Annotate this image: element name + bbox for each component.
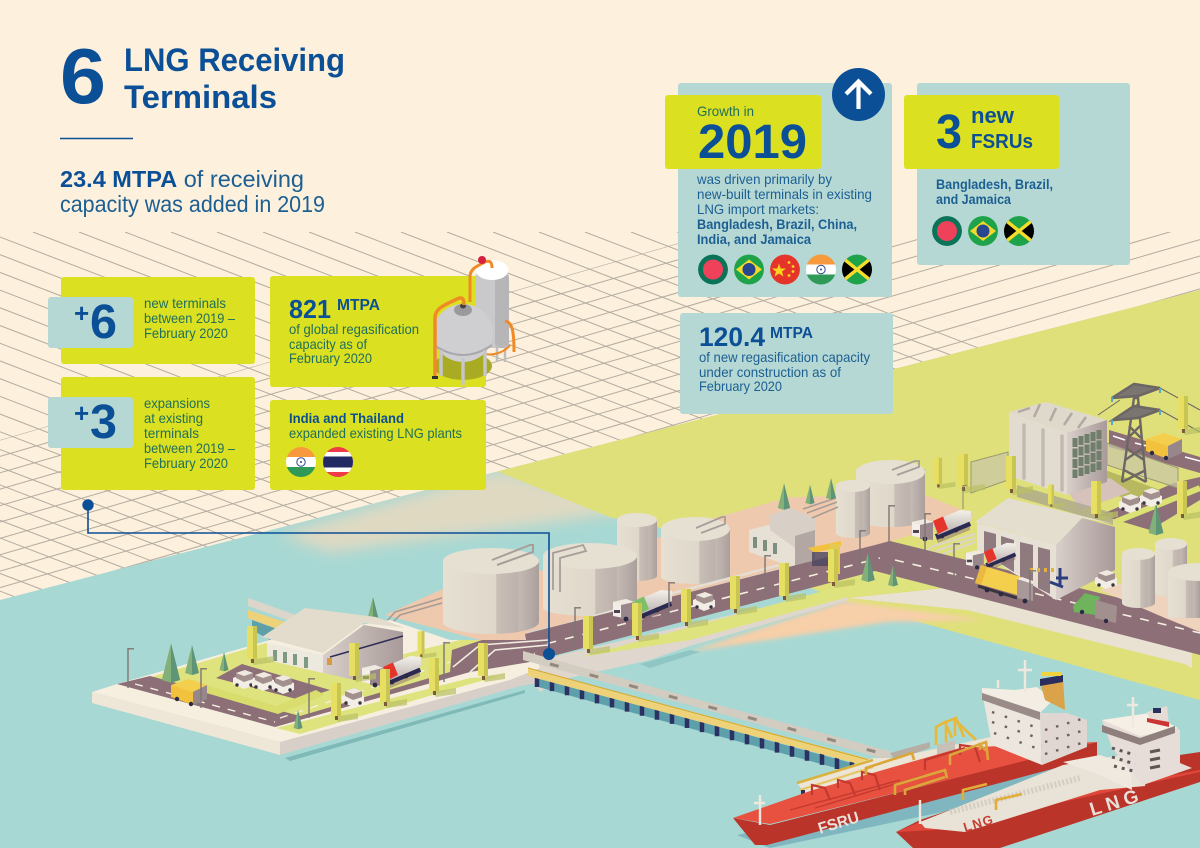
- panel: global regasification capacity: February 2020: [289, 350, 372, 366]
- title: 6: [60, 32, 106, 120]
- panel: expansions: [48, 377, 255, 490]
- title: Terminals: [124, 79, 277, 115]
- panel: growth in 2019: 2019: [698, 116, 807, 169]
- LNG ship: [896, 697, 1200, 848]
- panel: growth in 2019: [665, 83, 892, 297]
- power pylon: [1098, 384, 1200, 482]
- subtitle: [60, 166, 325, 217]
- small rear jetty: [248, 598, 296, 640]
- street lamps right: [575, 485, 1036, 647]
- panel: new terminals: February 2020: [144, 325, 228, 341]
- label: FSRU hull lettering: FSRU: [816, 809, 861, 838]
- panel: global regasification capacity: capacity as of: [289, 336, 367, 352]
- label: LNG hull lettering: LNG: [961, 812, 995, 835]
- subtitle: capacity was added in 2019: [60, 191, 325, 217]
- panel: under construction: [680, 313, 893, 414]
- left vehicles: [171, 656, 421, 707]
- panel: new terminals: 6: [90, 296, 117, 349]
- subtitle: 23.4 MTPA of receiving: [60, 166, 304, 192]
- panel: growth in 2019: Bangladesh, Brazil, China,: [697, 216, 857, 232]
- panel: global regasification capacity: MTPA: [337, 297, 380, 314]
- panel: expansions: between 2019 –: [144, 440, 235, 456]
- bollard trees right: [583, 396, 1200, 655]
- vehicles on main roads: [613, 433, 1182, 623]
- panel: India and Thailand: expanded existing LNG plants: [289, 425, 462, 441]
- panel: under construction: of new regasification capacity: [699, 349, 870, 365]
- panel: India and Thailand: [270, 400, 486, 490]
- label: LNG hull lettering: [961, 786, 1141, 835]
- panel: new FSRUs: and Jamaica: [936, 191, 1011, 207]
- left bollards and lamps: [128, 626, 505, 722]
- icon: LNG storage tanks: [432, 256, 514, 385]
- title: LNG Receiving: [124, 42, 345, 78]
- panel: new FSRUs: 3: [936, 106, 962, 159]
- fences: [971, 443, 1178, 525]
- panel: global regasification capacity: 821: [289, 294, 331, 324]
- panel: under construction: February 2020: [699, 378, 782, 394]
- storage tanks back row: [543, 460, 925, 616]
- panel: growth in 2019: LNG import markets:: [697, 201, 819, 217]
- icon: up arrow: [832, 68, 885, 121]
- FSRU ship: [733, 660, 1110, 848]
- right storage tanks: [1100, 538, 1200, 632]
- panel: new terminals: new terminals: [144, 295, 226, 311]
- label: LNG hull lettering: LNG: [1087, 786, 1141, 821]
- sea: [0, 290, 1200, 848]
- panel: global regasification capacity: [270, 276, 486, 387]
- panel: under construction: under construction as of: [699, 364, 841, 380]
- warehouse right: [975, 498, 1115, 600]
- tank 1 and link line ground: [443, 545, 539, 634]
- pipelines: [387, 498, 975, 646]
- isometric grid: [0, 232, 1200, 596]
- panel: growth in 2019: was driven primarily by: [696, 171, 832, 187]
- administration block: [749, 508, 815, 568]
- panel: new FSRUs: FSRUs: [971, 131, 1033, 153]
- panel: growth in 2019: Growth in: [697, 103, 754, 119]
- main jetty: [523, 651, 893, 774]
- panel: growth in 2019: India, and Jamaica: [697, 231, 811, 247]
- left trees: [162, 643, 302, 729]
- connector line: [82, 499, 555, 660]
- panel: new terminals: between 2019 –: [144, 310, 235, 326]
- panel: growth in 2019: new-built terminals in existing: [697, 186, 872, 202]
- left warehouse: [262, 608, 405, 680]
- silo building: [1009, 402, 1107, 495]
- title: [60, 32, 345, 120]
- trees: [367, 478, 1164, 622]
- panel: new FSRUs: [904, 83, 1130, 265]
- panel: expansions: February 2020: [144, 455, 228, 471]
- main roads: [525, 541, 1200, 662]
- panel: expansions: expansions: [144, 395, 210, 411]
- land: [280, 280, 1200, 700]
- scene: back fields and roads: [385, 430, 1200, 640]
- panel: new terminals: +: [74, 298, 89, 328]
- panel: new FSRUs: new: [971, 103, 1015, 128]
- panel: under construction: 120.4: [699, 322, 765, 352]
- panel: new FSRUs: Bangladesh, Brazil,: [936, 176, 1053, 192]
- panel: expansions: terminals: [144, 425, 199, 441]
- panel: expansions: 3: [90, 396, 117, 449]
- panel: India and Thailand: India and Thailand: [289, 410, 404, 426]
- tanker loading platform: [797, 718, 1020, 800]
- panel: new terminals: [48, 277, 255, 364]
- panel: expansions: +: [74, 398, 89, 428]
- panel: global regasification capacity: of global regasification: [289, 321, 419, 337]
- panel: expansions: at existing: [144, 410, 203, 426]
- left platform: [92, 620, 548, 761]
- concrete quay: [525, 587, 1192, 692]
- panel: under construction: MTPA: [770, 325, 813, 342]
